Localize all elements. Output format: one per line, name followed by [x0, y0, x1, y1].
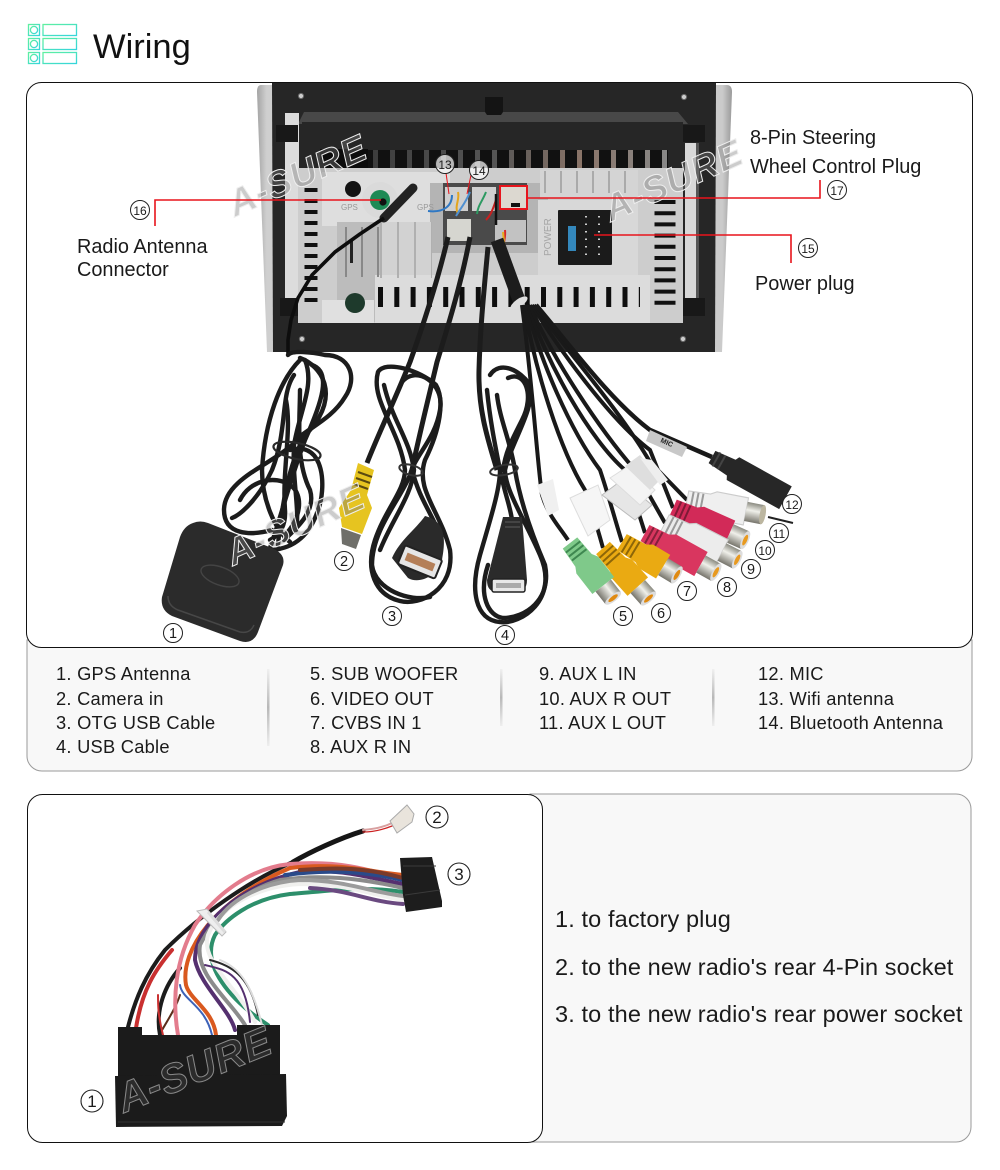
cable bundle: AV wires — [497, 240, 793, 548]
radio side slits — [276, 113, 705, 316]
cable: GPS antenna with loops — [224, 188, 413, 550]
callout labels: Power plug — [755, 273, 855, 295]
watermarks: A-SURE — [221, 127, 374, 225]
harness wires — [128, 823, 403, 1078]
legend column 4: 12. MIC — [758, 663, 824, 684]
circled numbers on photo: 1 — [169, 626, 177, 642]
connector: RCA 10 red — [667, 495, 754, 554]
legend column 3: 10. AUX R OUT — [539, 688, 671, 709]
circled numbers on photo: 3 — [388, 609, 396, 625]
circled numbers on photo: 9 — [747, 562, 755, 578]
connector: RCA 8 red — [638, 521, 726, 586]
cable: camera in — [367, 237, 448, 463]
callout labels: Radio Antenna — [77, 236, 208, 258]
panel: harness description background — [530, 794, 971, 1142]
connector: RCA 6 yellow — [593, 539, 661, 610]
circled numbers on photo: 5 — [619, 609, 627, 625]
harness circled numbers: 1 — [87, 1092, 97, 1111]
harness circled numbers — [81, 806, 470, 1112]
watermarks: A-SURE — [219, 476, 372, 574]
icon: wiring list — [28, 24, 76, 64]
legend column 3: 11. AUX L OUT — [539, 712, 666, 733]
legend column 2: 7. CVBS IN 1 — [310, 712, 422, 733]
circled numbers on photo: 11 — [773, 527, 786, 541]
legend column 2: 8. AUX R IN — [310, 736, 411, 757]
circled numbers on photo: 15 — [801, 242, 815, 256]
title: Wiring — [93, 28, 191, 66]
legend column 4: 14. Bluetooth Antenna — [758, 712, 944, 733]
circled numbers on photo: 14 — [472, 164, 486, 178]
connector: USB socket — [492, 579, 525, 592]
watermarks: A-SURE — [597, 132, 750, 230]
radio dark bezel — [272, 83, 716, 352]
watermark on harness: A-SURE — [109, 1017, 279, 1122]
harness circled numbers: 3 — [454, 865, 464, 884]
connector: RCA 5 green — [559, 535, 626, 609]
plate holes: GPS — [341, 203, 358, 212]
circled numbers on photo — [130, 154, 846, 644]
screws — [298, 93, 687, 342]
harness cable tie — [197, 909, 226, 936]
plate holes — [341, 181, 434, 313]
connector: radio antenna socket — [362, 182, 398, 218]
watermarks — [219, 127, 750, 574]
harness connector 1 — [115, 1025, 287, 1127]
radio outer silver frame — [257, 85, 732, 352]
connector: RCA 9 white — [659, 511, 747, 574]
callout labels — [77, 127, 921, 295]
connector: power socket: POWER — [543, 218, 554, 256]
connector: OTG USB socket — [398, 545, 442, 579]
plate vents and fins — [311, 182, 665, 305]
connector: yellow camera RCA — [339, 463, 374, 549]
callout labels: Connector — [77, 259, 169, 281]
circled numbers on photo: 8 — [723, 580, 731, 596]
cable: OTG USB — [371, 237, 470, 602]
harness description text: 2. to the new radio's rear 4-Pin socket — [555, 954, 954, 980]
harness description text: 1. to factory plug — [555, 906, 731, 932]
connector: power socket — [543, 210, 612, 265]
plate holes: GPS — [417, 203, 434, 212]
legend column 1 — [56, 663, 215, 757]
legend column 1: 1. GPS Antenna — [56, 663, 191, 684]
circled numbers on photo: 13 — [438, 158, 452, 172]
circled numbers on photo: 10 — [758, 544, 772, 558]
harness circled numbers: 2 — [432, 808, 442, 827]
legend column 2: 6. VIDEO OUT — [310, 688, 434, 709]
radio rear unit — [257, 83, 732, 352]
legend column 3: 9. AUX L IN — [539, 663, 637, 684]
circled numbers on photo: 2 — [340, 554, 348, 570]
circled numbers on photo: 4 — [501, 628, 509, 644]
legend column 1: 3. OTG USB Cable — [56, 712, 215, 733]
callout labels: 8-Pin Steering — [750, 127, 876, 149]
legend column 2: 5. SUB WOOFER — [310, 663, 459, 684]
GPS antenna puck — [162, 522, 284, 642]
connector: RCA 7 yellow — [615, 530, 687, 589]
harness connector 3 — [400, 857, 442, 912]
red pointer lines — [155, 173, 820, 263]
panel: legend background — [27, 640, 972, 771]
cable: USB — [475, 247, 546, 622]
legend column 1: 4. USB Cable — [56, 736, 170, 757]
legend column 1: 2. Camera in — [56, 688, 164, 709]
circled numbers on photo: 12 — [785, 498, 799, 512]
MIC label: MIC — [659, 437, 674, 449]
harness connector 2 — [390, 805, 414, 833]
MIC label — [646, 430, 687, 457]
legend column 3 — [539, 663, 671, 733]
radio black upper panel with vents — [302, 122, 683, 170]
legend column 4: 13. Wifi antenna — [758, 688, 895, 709]
connector: MIC plug — [706, 446, 792, 509]
circled numbers on photo: 7 — [683, 584, 691, 600]
radio silver back plate — [298, 168, 683, 323]
callout labels: Wheel Control Plug — [750, 156, 921, 178]
legend column 2 — [310, 663, 459, 757]
circled numbers on photo: 17 — [830, 184, 844, 198]
connector: RCA 11 white — [684, 486, 768, 529]
circled numbers on photo: 16 — [133, 204, 147, 218]
circled numbers on photo: 6 — [657, 606, 665, 622]
panel: harness photo — [28, 794, 542, 1142]
plate raised regions — [322, 170, 650, 323]
harness description text — [555, 906, 963, 1027]
harness description text: 3. to the new radio's rear power socket — [555, 1001, 963, 1027]
legend column 4 — [758, 663, 944, 733]
connectors: rear socket block — [428, 183, 527, 252]
panel: radio rear photo — [26, 82, 972, 648]
wire labels — [537, 430, 687, 536]
harness: sheathed 4-pin cable — [293, 823, 392, 862]
